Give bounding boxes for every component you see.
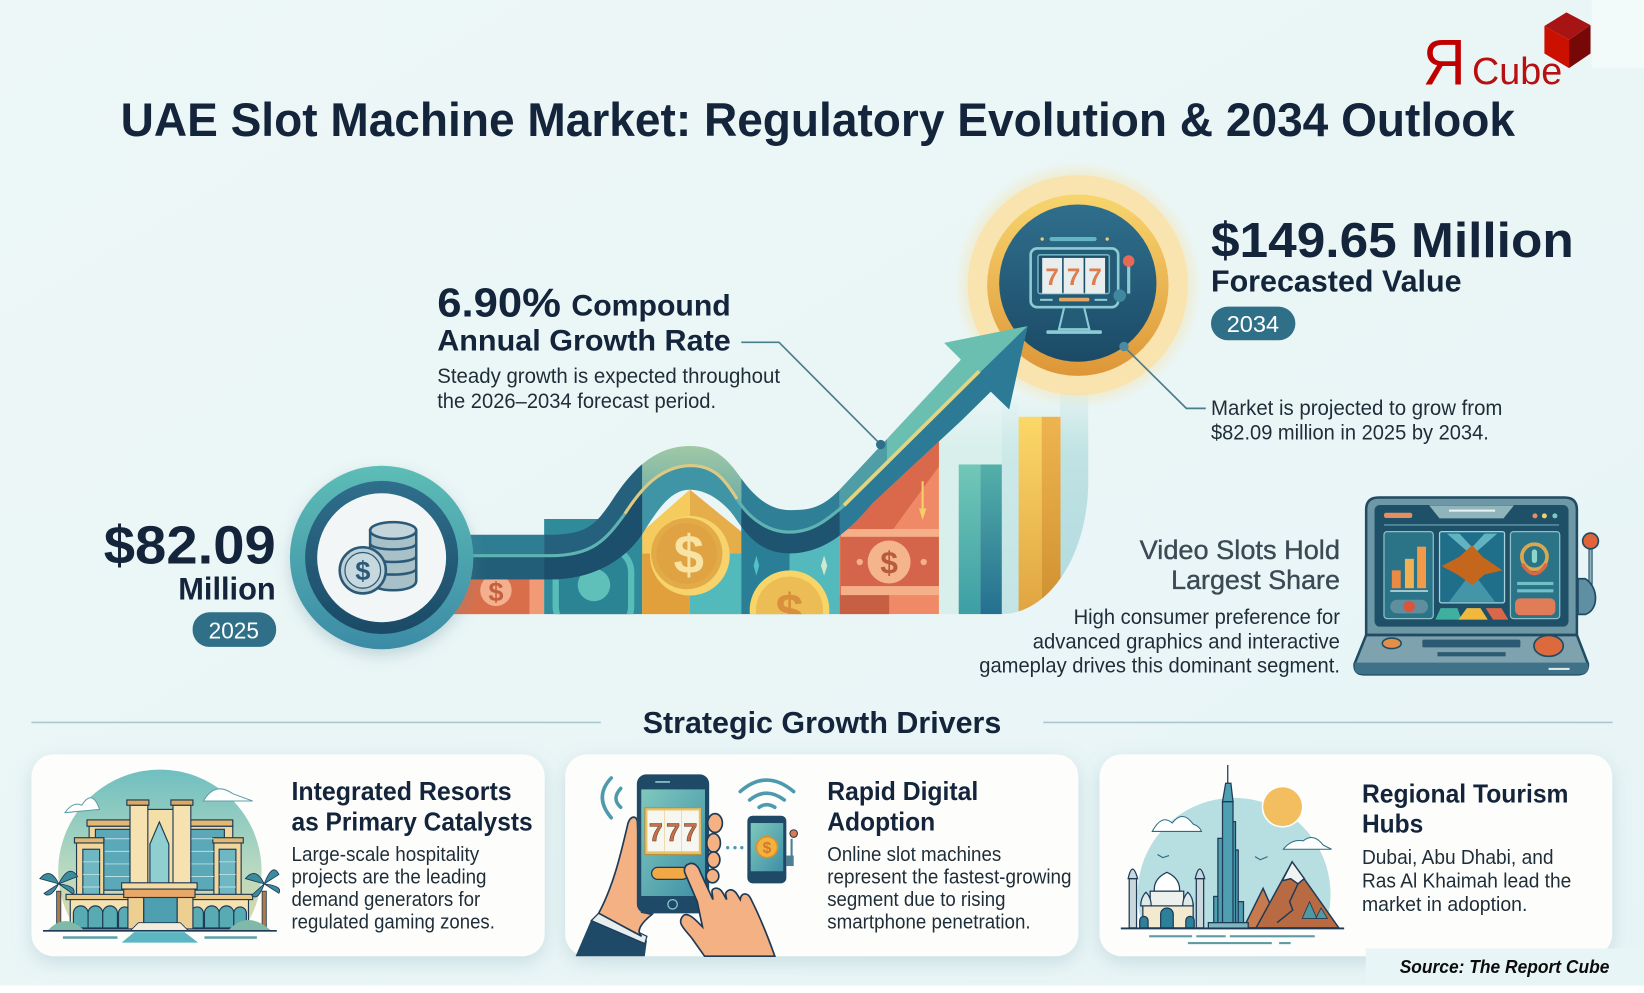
icon: skyline bbox=[1120, 764, 1344, 944]
text: video slots bbox=[979, 534, 1340, 678]
block: gold arrow with coin bbox=[642, 490, 741, 614]
text: video slots: gameplay drives this dominant segment. bbox=[979, 655, 1340, 678]
text: regional tourism bbox=[1362, 779, 1571, 916]
text: integrated resorts: Integrated Resorts bbox=[291, 776, 512, 806]
sub: suit cuff bbox=[576, 913, 647, 956]
leader line: forecast to note bbox=[1119, 342, 1206, 408]
block: pale bars backdrop bbox=[939, 393, 1089, 615]
pill: 2034 bbox=[1211, 307, 1295, 340]
sub: reels bbox=[645, 808, 701, 854]
text: video slots: advanced graphics and interactive bbox=[1033, 630, 1340, 653]
block: teal bill bbox=[544, 519, 642, 614]
source note bbox=[1366, 948, 1644, 986]
block: orange bill: $ bbox=[488, 576, 504, 607]
icon: slot machine monitor: 7 bbox=[1088, 264, 1102, 291]
panel: bonus screen bbox=[1510, 532, 1560, 619]
stat: 2025 value: $82.09 bbox=[104, 517, 276, 576]
heading: strategic growth drivers: Strategic Growth Drivers bbox=[643, 706, 1001, 740]
logo wordmark: R bbox=[1423, 25, 1466, 98]
callout: CAGR bbox=[437, 280, 780, 413]
chart: growth area blocks bbox=[454, 394, 1088, 614]
text: integrated resorts: projects are the leading bbox=[291, 865, 486, 888]
bar: teal bbox=[959, 464, 1002, 614]
icon: coin stack: $ bbox=[355, 555, 370, 586]
text: video slots: Video Slots Hold bbox=[1140, 534, 1340, 565]
sub: mosque bbox=[1128, 869, 1205, 928]
panel: forecast circle with slot icon bbox=[954, 161, 1202, 409]
callout: CAGR: Compound bbox=[571, 290, 731, 323]
arrow: growth ribbon bbox=[470, 326, 1028, 580]
icon: coin stack bbox=[340, 522, 416, 593]
callout: CAGR: 6.90% bbox=[437, 280, 561, 326]
text: video slots: High consumer preference for bbox=[1074, 606, 1340, 629]
stat: 2034 value: $149.65 Million bbox=[1211, 213, 1574, 268]
icon: video slot laptop bbox=[1355, 497, 1598, 674]
text: regional tourism: market in adoption. bbox=[1362, 893, 1527, 916]
logo wordmark: Cube bbox=[1472, 50, 1562, 92]
sub: small phone: $ bbox=[763, 840, 772, 857]
text: integrated resorts: demand generators for bbox=[291, 888, 480, 911]
text: regional tourism: Ras Al Khaimah lead the bbox=[1362, 869, 1571, 892]
panel: start value circle with coins bbox=[290, 466, 473, 649]
text: integrated resorts bbox=[291, 776, 533, 933]
icon: slot machine monitor bbox=[1031, 237, 1134, 334]
icon: resort building bbox=[39, 770, 280, 943]
panel: regional tourism hubs bbox=[1100, 754, 1612, 991]
text: rapid digital: represent the fastest-growing bbox=[827, 865, 1072, 888]
stat: 2034 value bbox=[1211, 213, 1574, 340]
text: video slots: Largest Share bbox=[1171, 564, 1340, 595]
sub: mountains bbox=[1243, 862, 1339, 928]
source note: Source: The Report Cube bbox=[1400, 956, 1609, 977]
text: rapid digital: Rapid Digital bbox=[827, 776, 978, 806]
text: integrated resorts: regulated gaming zones. bbox=[291, 910, 495, 933]
pill: 2025 bbox=[193, 612, 276, 647]
text: regional tourism: Regional Tourism bbox=[1362, 779, 1569, 809]
icon: slot machine monitor: 7 bbox=[1067, 264, 1080, 291]
icon: phone with hands bbox=[576, 774, 797, 956]
sub: reels: 7 bbox=[683, 819, 697, 847]
text: rapid digital: smartphone penetration. bbox=[827, 910, 1031, 933]
logo bbox=[1423, 12, 1591, 98]
panel: integrated resorts bbox=[31, 754, 545, 973]
text: regional tourism: Hubs bbox=[1362, 808, 1423, 838]
pill: 2025: 2025 bbox=[209, 618, 259, 644]
sub: reels: 7 bbox=[666, 819, 680, 847]
pill: 2034: 2034 bbox=[1227, 311, 1279, 337]
stat: 2025 value bbox=[104, 517, 276, 647]
icon: palm trees bbox=[40, 870, 280, 930]
sub: small phone bbox=[747, 816, 797, 883]
bar: yellow bbox=[1019, 417, 1061, 615]
text: regional tourism: Dubai, Abu Dhabi, and bbox=[1362, 846, 1554, 869]
panel: rapid digital adoption bbox=[565, 754, 1078, 956]
callout: CAGR: Steady growth is expected throughout bbox=[437, 365, 780, 388]
text: integrated resorts: Large-scale hospitality bbox=[291, 843, 480, 866]
text: forecast note: $82.09 million in 2025 by 2034. bbox=[1211, 421, 1489, 444]
sub: reels: 7 bbox=[649, 819, 663, 847]
text: rapid digital bbox=[827, 776, 1072, 933]
callout: CAGR: the 2026–2034 forecast period. bbox=[437, 390, 716, 413]
sub: tower bbox=[1208, 765, 1248, 928]
icon: slot machine monitor: 7 bbox=[1045, 264, 1059, 291]
text: rapid digital: segment due to rising bbox=[827, 888, 1005, 911]
text: integrated resorts: as Primary Catalysts bbox=[291, 807, 533, 837]
panel: game art screen bbox=[1440, 532, 1505, 603]
block: red bill bbox=[840, 442, 939, 614]
text: rapid digital: Online slot machines bbox=[827, 843, 1001, 866]
block: teal column with coin bbox=[741, 526, 840, 614]
logo wordmark bbox=[1423, 25, 1562, 98]
stat: 2025 value: Million bbox=[178, 572, 276, 607]
callout: CAGR: Annual Growth Rate bbox=[437, 325, 731, 358]
block: orange bill bbox=[454, 579, 544, 614]
logo cube bbox=[1544, 12, 1591, 68]
block: red bill: $ bbox=[880, 546, 898, 581]
stat: 2034 value: Forecasted Value bbox=[1211, 264, 1462, 298]
block: teal column with coin: $ bbox=[776, 583, 804, 640]
block: gold arrow with coin: $ bbox=[674, 525, 704, 586]
leader line: CAGR to arrow bbox=[741, 342, 885, 449]
text: rapid digital: Adoption bbox=[827, 807, 935, 837]
title: UAE Slot Machine Market: Regulatory Evolution & 2034 Outlook bbox=[121, 93, 1516, 146]
text: forecast note bbox=[1211, 397, 1502, 444]
text: forecast note: Market is projected to grow from bbox=[1211, 397, 1502, 420]
panel: chart screen bbox=[1384, 532, 1433, 619]
